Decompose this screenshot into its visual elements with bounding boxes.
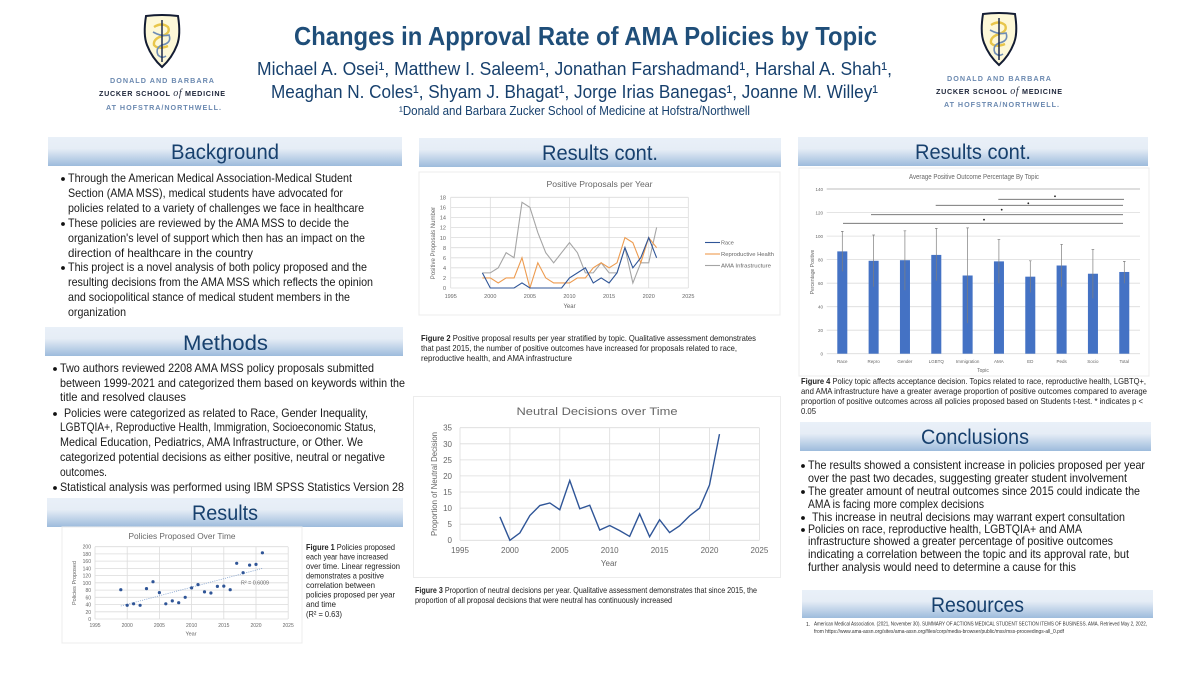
line chart: positive proposals per year: 2000 bbox=[484, 294, 496, 300]
scatter chart: policies proposed over time: R² = 0.6009 bbox=[241, 580, 269, 586]
text block: conclusions bullets: infrastructure showed a greater percentage of positive outcomes bbox=[808, 534, 1113, 548]
bar chart: average positive outcome percentage by topic bbox=[799, 168, 1149, 376]
caption: figure 1: policies proposed per year bbox=[306, 590, 395, 600]
legend: positive proposals: Race bbox=[721, 240, 734, 246]
bar chart: average positive outcome percentage by topic: Race bbox=[837, 359, 848, 364]
scatter chart: policies proposed over time: 20 bbox=[85, 610, 91, 616]
heading: methods: Methods bbox=[183, 332, 268, 355]
text block: conclusions bullets: The results showed a consistent increase in policies proposed per year bbox=[808, 458, 1145, 472]
line chart: neutral decisions over time: 15 bbox=[443, 488, 453, 497]
panel: conclusions bbox=[800, 422, 1151, 574]
scatter chart: policies proposed over time: 80 bbox=[85, 588, 91, 594]
text block: background bullets: resulting decisions from the AMA MSS which reflects the opinion bbox=[68, 275, 373, 289]
text block: conclusions bullets: further analysis would need to determine a cause for this bbox=[808, 560, 1076, 574]
line chart: neutral decisions over time: 2005 bbox=[551, 546, 569, 555]
line chart: positive proposals per year: 18 bbox=[440, 196, 446, 202]
legend: positive proposals: Reproductive Health bbox=[721, 252, 774, 258]
caption: figure 1: (R² = 0.63) bbox=[306, 609, 342, 619]
line chart: neutral decisions over time: 20 bbox=[443, 472, 453, 481]
text block: background bullets: and sociopolitical stance of medical student members in the bbox=[68, 290, 350, 304]
line chart: positive proposals per year: 2015 bbox=[603, 294, 615, 300]
text block: methods bullets: Policies were categorized as related to Race, Gender Inequality, bbox=[64, 406, 368, 420]
line chart: positive proposals per year: 6 bbox=[443, 256, 446, 262]
text block: background bullets: organization bbox=[68, 305, 126, 319]
text block: methods bullets: categorized potential decisions as either positive, neutral or negative bbox=[60, 450, 385, 464]
caption: figure 1: demonstrates a positive bbox=[306, 570, 384, 580]
line chart: neutral decisions over time: 2010 bbox=[601, 546, 619, 555]
heading: background bbox=[48, 137, 402, 166]
heading: methods bbox=[45, 327, 403, 356]
bar chart: average positive outcome percentage by topic: Average Positive Outcome Percentage By Topic bbox=[909, 174, 1039, 181]
bar chart: average positive outcome percentage by topic: 20 bbox=[818, 328, 823, 333]
bar chart: average positive outcome percentage by topic: Gender bbox=[897, 359, 913, 364]
bar chart: average positive outcome percentage by topic: 0 bbox=[820, 352, 823, 356]
authors: Meaghan N. Coles¹, Shyam J. Bhagat¹, Jorge Irias Banegas¹, Joanne M. Willey¹ bbox=[271, 81, 878, 102]
bar chart: average positive outcome percentage by topic: 80 bbox=[818, 258, 823, 262]
scatter chart: policies proposed over time: 100 bbox=[83, 581, 91, 587]
text block: background bullets: policies related to a variety of challenges we face in healthcare bbox=[68, 201, 364, 215]
text block: conclusions bullets: indicating a correlation between the topic and its approval rate, but bbox=[808, 547, 1130, 561]
line chart: neutral decisions over time: 10 bbox=[443, 504, 453, 513]
text block: methods bullets: LGBTQIA+, Reproductive Health, Immigration, Socioeconomic Status, bbox=[60, 420, 376, 434]
text block: background bullets: organization's level of support which then has an impact on the bbox=[68, 231, 365, 245]
caption: figure 4: Figure 4 Policy topic affects acceptance decision. Topics related to race, reproductive health, LGBTQ+, bbox=[801, 376, 1146, 386]
affiliation: ¹Donald and Barbara Zucker School of Medicine at Hofstra/Northwell bbox=[399, 104, 750, 118]
bar chart: average positive outcome percentage by topic: Repro bbox=[867, 359, 880, 364]
text block: conclusions bullets: The greater amount of neutral outcomes since 2015 could indicate the bbox=[808, 484, 1140, 498]
line chart: neutral decisions over time: 5 bbox=[448, 520, 453, 529]
caption: figure 4: proportion of positive outcomes across all policies proposed based on Students t-test. * indicates p < bbox=[801, 396, 1143, 406]
line chart: neutral decisions over time: 2020 bbox=[701, 546, 719, 555]
caption: figure 1: and time bbox=[306, 599, 336, 609]
caption: figure 2 bbox=[421, 333, 756, 363]
line chart: positive proposals per year: 4 bbox=[443, 266, 446, 272]
bar chart: average positive outcome percentage by topic: 140 bbox=[815, 187, 823, 192]
line chart: positive proposals per year: 0 bbox=[443, 286, 446, 292]
panel: results bbox=[47, 498, 403, 643]
line chart: neutral decisions over time: 30 bbox=[443, 440, 453, 449]
line chart: neutral decisions over time: Proportion of Neutral Decision bbox=[430, 432, 439, 536]
line chart: positive proposals per year: 12 bbox=[440, 226, 446, 232]
line chart: positive proposals per year: 10 bbox=[440, 236, 446, 242]
logo text: left: ZUCKER SCHOOL of MEDICINE bbox=[99, 88, 225, 99]
line chart: positive proposals per year: 2 bbox=[443, 276, 446, 282]
heading: resources: Resources bbox=[931, 594, 1024, 617]
text block: methods bullets: Medical Education, Pediatrics, AMA Infrastructure, or Other. We bbox=[60, 435, 363, 449]
text block: background bullets: direction of healthcare in the country bbox=[68, 246, 253, 260]
icon: left shield bbox=[145, 15, 179, 67]
line chart: neutral decisions over time: 2025 bbox=[751, 546, 769, 555]
logo text: left bbox=[99, 76, 225, 112]
caption: figure 1 bbox=[306, 542, 400, 619]
bar chart: average positive outcome percentage by topic: Topic bbox=[977, 368, 989, 374]
text block: methods bullets: title and resolved clauses bbox=[60, 390, 186, 404]
line chart: positive proposals per year: 2005 bbox=[524, 294, 536, 300]
title: Changes in Approval Rate of AMA Policies by Topic bbox=[294, 21, 877, 51]
scatter chart: policies proposed over time: 60 bbox=[85, 595, 91, 601]
text block: methods bullets: Two authors reviewed 2208 AMA MSS policy proposals submitted bbox=[60, 361, 374, 375]
logo text: left: AT HOFSTRA/NORTHWELL. bbox=[106, 103, 221, 112]
heading: background: Background bbox=[171, 141, 279, 164]
line chart: neutral decisions over time: 2015 bbox=[651, 546, 669, 555]
panel: background bbox=[48, 137, 402, 319]
line chart: positive proposals per year: Positive Proposals Number bbox=[431, 207, 437, 279]
heading: results cont. right bbox=[798, 137, 1148, 166]
caption: figure 4: and AMA infrastructure have a greater average proportion of positive outcomes compared to average bbox=[801, 386, 1147, 396]
heading: results: Results bbox=[192, 502, 258, 525]
caption: figure 1: each year have increased bbox=[306, 552, 388, 562]
text block: conclusions bullets: Policies on race, reproductive health, LGBTQIA+ and AMA bbox=[808, 522, 1082, 536]
line chart: neutral decisions over time bbox=[414, 396, 780, 578]
scatter chart: policies proposed over time: 2020 bbox=[250, 623, 262, 629]
caption: figure 3: proportion of all proposal decisions that were neutral has continuously increased bbox=[415, 595, 672, 605]
scatter chart: policies proposed over time: 2025 bbox=[283, 623, 294, 629]
scatter chart: policies proposed over time: 160 bbox=[83, 559, 91, 565]
heading: conclusions: Conclusions bbox=[921, 426, 1029, 449]
text block: conclusions bullets: AMA is facing more complex decisions bbox=[808, 497, 984, 511]
line chart: neutral decisions over time: Neutral Decisions over Time bbox=[516, 406, 678, 418]
bar chart: average positive outcome percentage by topic: 40 bbox=[818, 304, 823, 310]
line chart: positive proposals per year: Positive Proposals per Year bbox=[546, 179, 653, 189]
scatter chart: policies proposed over time: Policies Proposed Over Time bbox=[128, 532, 236, 541]
line chart: neutral decisions over time: 1995 bbox=[451, 546, 469, 555]
text block: methods bullets: outcomes. bbox=[60, 465, 107, 479]
line chart: positive proposals per year: 8 bbox=[443, 246, 446, 252]
text block: background bullets: Through the American Medical Association-Medical Student bbox=[68, 171, 353, 185]
logo text: left: DONALD AND BARBARA bbox=[110, 76, 214, 85]
caption: figure 2: reproductive health, and AMA infrastructure bbox=[421, 353, 572, 363]
logo text: right bbox=[936, 74, 1062, 109]
panel: results cont. right bbox=[798, 137, 1149, 416]
text block: methods bullets bbox=[53, 361, 405, 494]
bar chart: average positive outcome percentage by topic: LGBTQ bbox=[929, 359, 944, 364]
scatter chart: policies proposed over time: 0 bbox=[88, 617, 91, 623]
legend: positive proposals: AMA Infrastructure bbox=[721, 264, 771, 270]
line chart: positive proposals per year: 1995 bbox=[445, 294, 457, 300]
scatter chart: policies proposed over time: 1995 bbox=[89, 623, 101, 629]
scatter chart: policies proposed over time: 180 bbox=[83, 552, 91, 558]
heading: results bbox=[47, 498, 403, 527]
reference list bbox=[806, 622, 1147, 635]
heading: results cont. right: Results cont. bbox=[915, 141, 1031, 164]
bar chart: average positive outcome percentage by topic: 60 bbox=[818, 281, 823, 286]
line chart: neutral decisions over time: 35 bbox=[443, 424, 453, 432]
authors bbox=[257, 58, 892, 102]
bar chart: average positive outcome percentage by topic: Total bbox=[1120, 359, 1129, 364]
icon: right shield bbox=[982, 13, 1016, 65]
reference list: 1. bbox=[806, 622, 810, 628]
caption: figure 1: over time. Linear regression bbox=[306, 561, 400, 571]
bar chart: average positive outcome percentage by topic: 100 bbox=[815, 234, 823, 239]
line chart: positive proposals per year: 2020 bbox=[643, 294, 655, 300]
logo text: right: DONALD AND BARBARA bbox=[947, 74, 1051, 83]
text block: background bullets: Section (AMA MSS), medical students have advocated for bbox=[68, 186, 343, 200]
scatter chart: policies proposed over time: 2005 bbox=[154, 623, 165, 629]
caption: figure 3: Figure 3 Proportion of neutral decisions per year. Qualitative assessment demonstrates that since 2015, the bbox=[415, 585, 757, 595]
text block: background bullets: These policies are reviewed by the AMA MSS to decide the bbox=[68, 216, 349, 230]
text block: methods bullets: between 1999-2021 and categorized them based on keywords within the bbox=[60, 376, 405, 390]
text block: background bullets: This project is a novel analysis of both policy proposed and the bbox=[68, 260, 367, 274]
heading: conclusions bbox=[800, 422, 1151, 451]
bar chart: average positive outcome percentage by topic: Percentage Positive bbox=[810, 250, 816, 294]
caption: figure 3 bbox=[415, 585, 757, 605]
logo text: right: ZUCKER SCHOOL of MEDICINE bbox=[936, 86, 1062, 97]
line chart: positive proposals per year bbox=[419, 172, 780, 315]
line chart: neutral decisions over time: Year bbox=[601, 559, 617, 568]
caption: figure 4 bbox=[801, 376, 1147, 416]
bar chart: average positive outcome percentage by topic: Immigration bbox=[956, 359, 980, 364]
line chart: neutral decisions over time: 0 bbox=[448, 536, 453, 545]
bar chart: average positive outcome percentage by topic: AMA bbox=[994, 359, 1004, 364]
line chart: positive proposals per year: 14 bbox=[440, 216, 446, 222]
caption: figure 1: correlation between bbox=[306, 580, 375, 590]
scatter chart: policies proposed over time: 120 bbox=[83, 574, 91, 580]
legend: positive proposals bbox=[705, 240, 774, 270]
scatter chart: policies proposed over time: 140 bbox=[83, 566, 91, 572]
line chart: positive proposals per year: 16 bbox=[440, 206, 446, 212]
text block: conclusions bullets: over the past two decades, suggesting greater student involvement bbox=[808, 471, 1128, 485]
bar chart: average positive outcome percentage by topic: Peds bbox=[1056, 359, 1067, 364]
reference list: American Medical Association. (2021, November 30). SUMMARY OF ACTIONS MEDICAL STUDENT SECTION ITEMS OF BUSINESS. AMA. Retrieved May 2, 2022, bbox=[814, 622, 1147, 628]
reference list: from https://www.ama-assn.org/sites/ama-assn.org/files/corp/media-browser/public/mss/mss-proceedings-all_0.pdf bbox=[814, 629, 1065, 635]
significance brackets bbox=[843, 195, 1124, 223]
text block: conclusions bullets: This increase in neutral decisions may warrant expert consultation bbox=[812, 510, 1125, 524]
bar chart: average positive outcome percentage by topic: ED bbox=[1027, 359, 1034, 364]
text block: methods bullets: Statistical analysis was performed using IBM SPSS Statistics Version 28 bbox=[60, 480, 404, 494]
caption: figure 2: Figure 2 Positive proposal results per year stratified by topic. Qualitative assessment demonstrates bbox=[421, 333, 756, 343]
heading: resources bbox=[802, 590, 1153, 618]
bar chart: average positive outcome percentage by topic: 120 bbox=[815, 210, 823, 216]
logo: right Zucker School of Medicine bbox=[936, 13, 1062, 109]
caption: figure 1: Figure 1 Policies proposed bbox=[306, 542, 395, 552]
panel: resources bbox=[802, 590, 1153, 635]
text block: conclusions bullets bbox=[801, 458, 1145, 574]
scatter chart: policies proposed over time bbox=[62, 527, 302, 643]
authors: Michael A. Osei¹, Matthew I. Saleem¹, Jonathan Farshadmand¹, Harshal A. Shah¹, bbox=[257, 58, 892, 79]
scatter chart: policies proposed over time: Year bbox=[185, 632, 197, 638]
caption: figure 2: that past 2015, the number of positive outcomes have increased for proposals related to race, bbox=[421, 343, 737, 353]
line chart: neutral decisions over time: 25 bbox=[443, 456, 453, 465]
line chart: neutral decisions over time: 2000 bbox=[501, 546, 519, 555]
scatter chart: policies proposed over time: 2015 bbox=[218, 623, 230, 629]
logo: left Zucker School of Medicine bbox=[99, 15, 225, 112]
bar chart: average positive outcome percentage by topic: Socio bbox=[1087, 359, 1099, 364]
panel: results cont. middle bbox=[414, 138, 781, 605]
scatter chart: policies proposed over time: 2010 bbox=[186, 623, 197, 629]
heading: results cont. middle: Results cont. bbox=[542, 142, 658, 165]
logo text: right: AT HOFSTRA/NORTHWELL. bbox=[944, 100, 1059, 109]
scatter chart: policies proposed over time: 40 bbox=[85, 602, 91, 608]
line chart: positive proposals per year: 2010 bbox=[563, 294, 576, 300]
text block: background bullets bbox=[61, 171, 373, 319]
bars bbox=[837, 251, 1129, 354]
scatter chart: policies proposed over time: 2000 bbox=[122, 623, 133, 629]
error bars bbox=[841, 228, 1126, 323]
panel: methods bbox=[45, 327, 405, 494]
line chart: positive proposals per year: Year bbox=[563, 304, 576, 310]
caption: figure 4: 0.05 bbox=[801, 406, 816, 416]
scatter chart: policies proposed over time: Policies Proposed bbox=[72, 561, 78, 605]
line chart: positive proposals per year: 2025 bbox=[682, 294, 694, 300]
scatter chart: policies proposed over time: 200 bbox=[83, 545, 91, 551]
heading: results cont. middle bbox=[419, 138, 781, 167]
